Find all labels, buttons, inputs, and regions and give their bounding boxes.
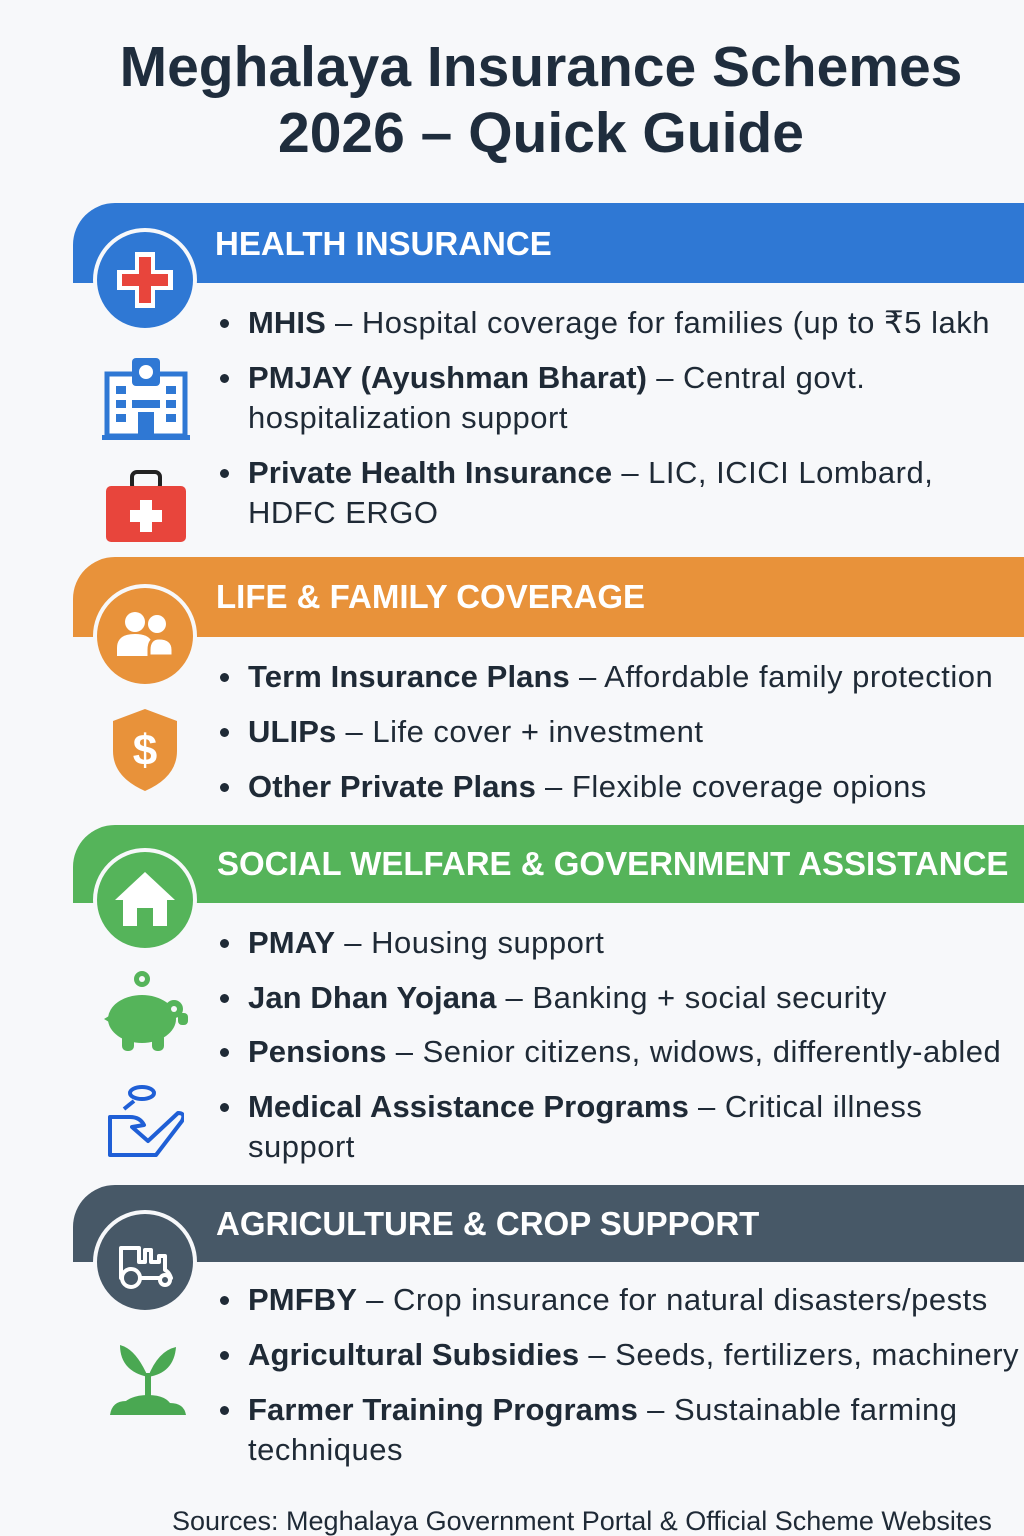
panel: social welfare: Jan Dhan Yojana – Banking + social security [248,980,887,1015]
panel: life & family: ULIPs – Life cover + investment [248,714,703,749]
icon: helping hand [108,1085,184,1157]
panel: health insurance: PMJAY (Ayushman Bharat) – Central govt. [248,360,865,395]
icon: shield dollar [113,709,177,791]
icon: shield dollar: $ [133,726,157,775]
bullets: health: MHIS – Hospital coverage for families (up to ₹5 lakh [248,305,990,340]
panel: social welfare [73,825,1024,1164]
sources footer: Sources: Meghalaya Government Portal & Official Scheme Websites [172,1506,992,1536]
bullets: agriculture: PMFBY – Crop insurance for natural disasters/pests [248,1282,988,1317]
panel: agriculture: Agricultural Subsidies – Seeds, fertilizers, machinery [248,1337,1019,1372]
icon: hospital [102,358,190,440]
title [120,35,962,165]
icon: house [93,848,197,952]
panel: health insurance: HDFC ERGO [248,495,438,530]
panel: social welfare: Medical Assistance Programs – Critical illness [248,1089,922,1124]
heading: health: HEALTH INSURANCE [215,225,552,262]
panel: agriculture: techniques [248,1432,403,1467]
panel: agriculture [73,1185,1024,1467]
banner: life [73,557,1024,637]
banner: health [73,203,1024,283]
heading: life: LIFE & FAMILY COVERAGE [216,578,645,615]
icon: piggy bank [104,971,188,1051]
icon: seedling [110,1345,186,1415]
panel: health insurance: Private Health Insurance – LIC, ICICI Lombard, [248,455,933,490]
panel: agriculture: Farmer Training Programs – Sustainable farming [248,1392,958,1427]
icon: family [93,584,197,688]
heading: agriculture: AGRICULTURE & CROP SUPPORT [216,1205,759,1242]
icon: first aid kit [106,470,186,542]
panel: social welfare: support [248,1129,355,1164]
banner: social [73,825,1024,903]
panel: health insurance [73,203,1024,542]
icon: tractor [93,1210,197,1314]
title: 2026 – Quick Guide [278,101,804,165]
panel: life & family [73,557,1024,804]
heading: social: SOCIAL WELFARE & GOVERNMENT ASSISTANCE [217,845,1008,882]
banner: agriculture [73,1185,1024,1262]
title: Meghalaya Insurance Schemes [120,35,962,99]
bullets: social: PMAY – Housing support [248,925,604,960]
panel: social welfare: Pensions – Senior citizens, widows, differently-abled [248,1034,1001,1069]
bullets: life: Term Insurance Plans – Affordable family protection [248,659,993,694]
icon: medical cross [93,228,197,332]
panel: health insurance: hospitalization support [248,400,568,435]
panel: life & family: Other Private Plans – Flexible coverage opions [248,769,927,804]
